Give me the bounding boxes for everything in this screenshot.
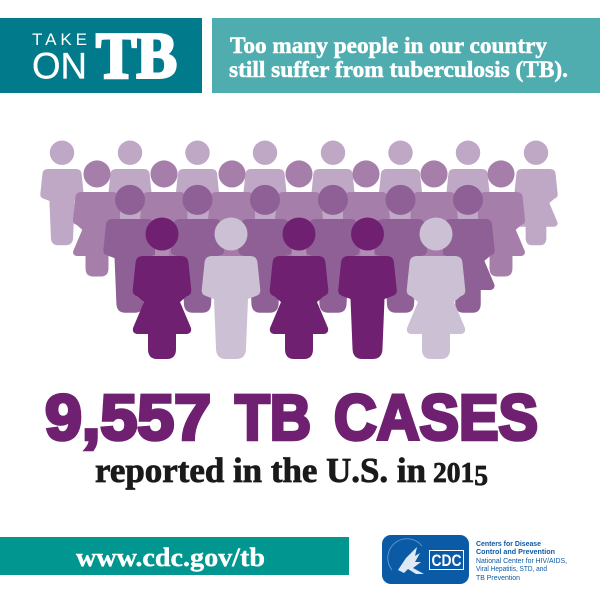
subheading: 201 — [433, 457, 476, 489]
figure: dark woman — [133, 218, 191, 359]
pictogram: crowd of people — [40, 141, 558, 359]
logo panel: Take on TB — [0, 18, 202, 93]
intro line 2: still suffer from tuberculosis (TB). — [229, 57, 568, 82]
CDC organisation text: Control and Prevention — [476, 547, 555, 556]
logo word: TB: TB — [96, 20, 177, 92]
second row of figures — [73, 160, 525, 276]
back row of figures — [40, 141, 558, 245]
figure: dark woman — [270, 218, 328, 359]
front row of figures — [133, 218, 465, 359]
website address: www.cdc.gov/tb — [76, 543, 265, 572]
CDC organisation text — [476, 539, 567, 582]
figure: light woman — [407, 218, 465, 359]
figure: dark man — [338, 218, 397, 359]
CDC organisation text: National Center for HIV/AIDS, — [476, 556, 567, 565]
figure: light man — [202, 218, 260, 359]
subheading: reported in the U.S. in — [95, 451, 426, 490]
headline: case count: 9,557 — [45, 382, 211, 454]
CDC organisation text: Centers for Disease — [476, 539, 541, 548]
CDC logo — [382, 535, 469, 584]
third row of figures — [103, 185, 495, 313]
header panel: intro statement — [212, 18, 600, 93]
footer bar: website — [0, 537, 349, 575]
logo word: TAKE: TAKE — [32, 30, 87, 49]
CDC wordmark: CDC — [432, 551, 462, 570]
icon: HHS eagle seal — [388, 539, 424, 574]
CDC organisation text: Viral Hepatitis, STD, and — [476, 564, 547, 573]
headline: case count — [45, 382, 538, 454]
headline: case count: TB — [235, 382, 311, 454]
intro line 1: Too many people in our country — [230, 33, 548, 58]
CDC organisation text: TB Prevention — [476, 573, 520, 582]
headline: case count: CASES — [334, 382, 538, 454]
logo word: ON: ON — [32, 46, 87, 86]
subheading: 5 — [474, 460, 488, 492]
